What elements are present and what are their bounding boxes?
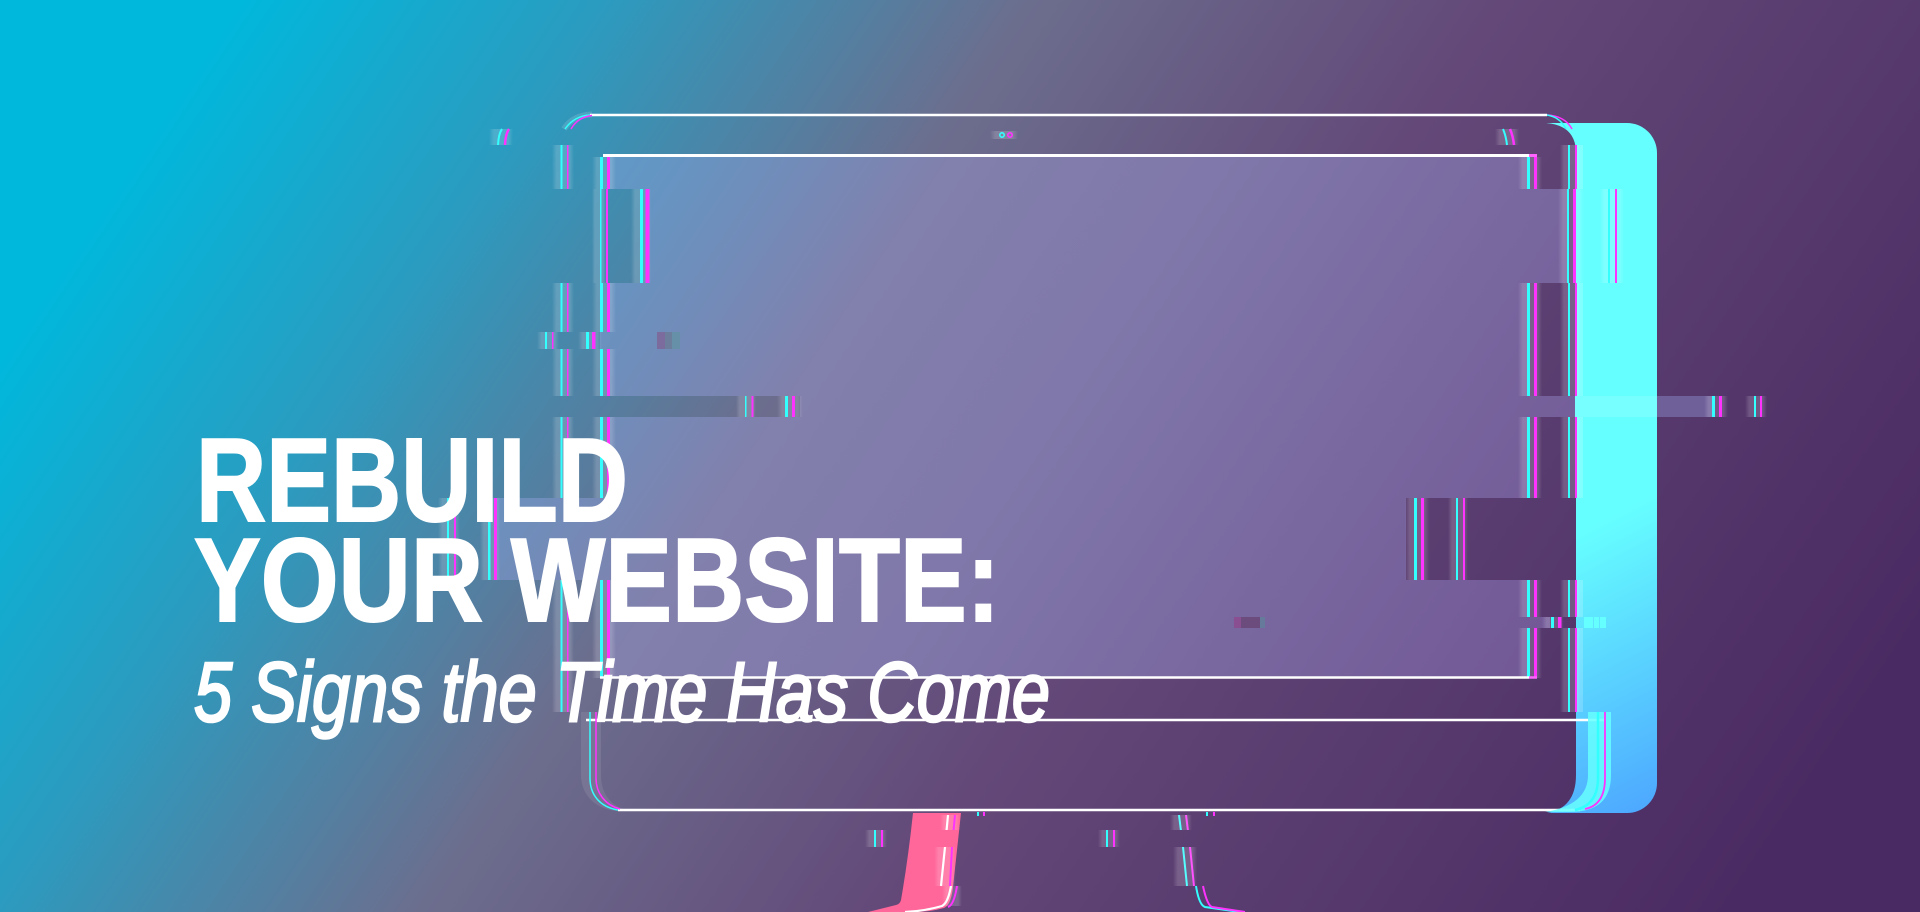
glitch row: long band shifted right bbox=[736, 396, 1767, 417]
heading line 1: REBUILD bbox=[196, 414, 628, 547]
glitch stripes on right bezel edges bbox=[1520, 145, 1583, 712]
glitch row: tall band shifted left bbox=[438, 498, 1468, 580]
glitch row: thin band on lower right bbox=[1234, 617, 1606, 628]
subtitle: 5 Signs the Time Has Come bbox=[194, 645, 1050, 739]
monitor stand pink leg bbox=[868, 813, 961, 912]
glitch row: short band shifted left bbox=[537, 332, 680, 349]
monitor screen fill with displaced glitch rows bbox=[497, 155, 1712, 678]
glitch row: band shifted right at upper screen bbox=[592, 189, 1624, 283]
glitch stripes on left bezel edges bbox=[553, 145, 614, 712]
heading line 2: YOUR WEBSITE: bbox=[194, 514, 1000, 647]
monitor webcam dot bbox=[990, 131, 1018, 139]
monitor outer top edge and corners bbox=[564, 114, 1572, 129]
title: main heading bbox=[194, 414, 1000, 647]
monitor back panel in cyan bbox=[1546, 123, 1657, 813]
monitor screen outline bbox=[600, 156, 1537, 678]
glitch row: top corners shifted bbox=[489, 129, 1519, 145]
monitor stand glitch strokes bbox=[865, 812, 1245, 912]
monitor chin outline bbox=[581, 712, 1611, 812]
icon: glitched monitor bbox=[438, 100, 1767, 912]
